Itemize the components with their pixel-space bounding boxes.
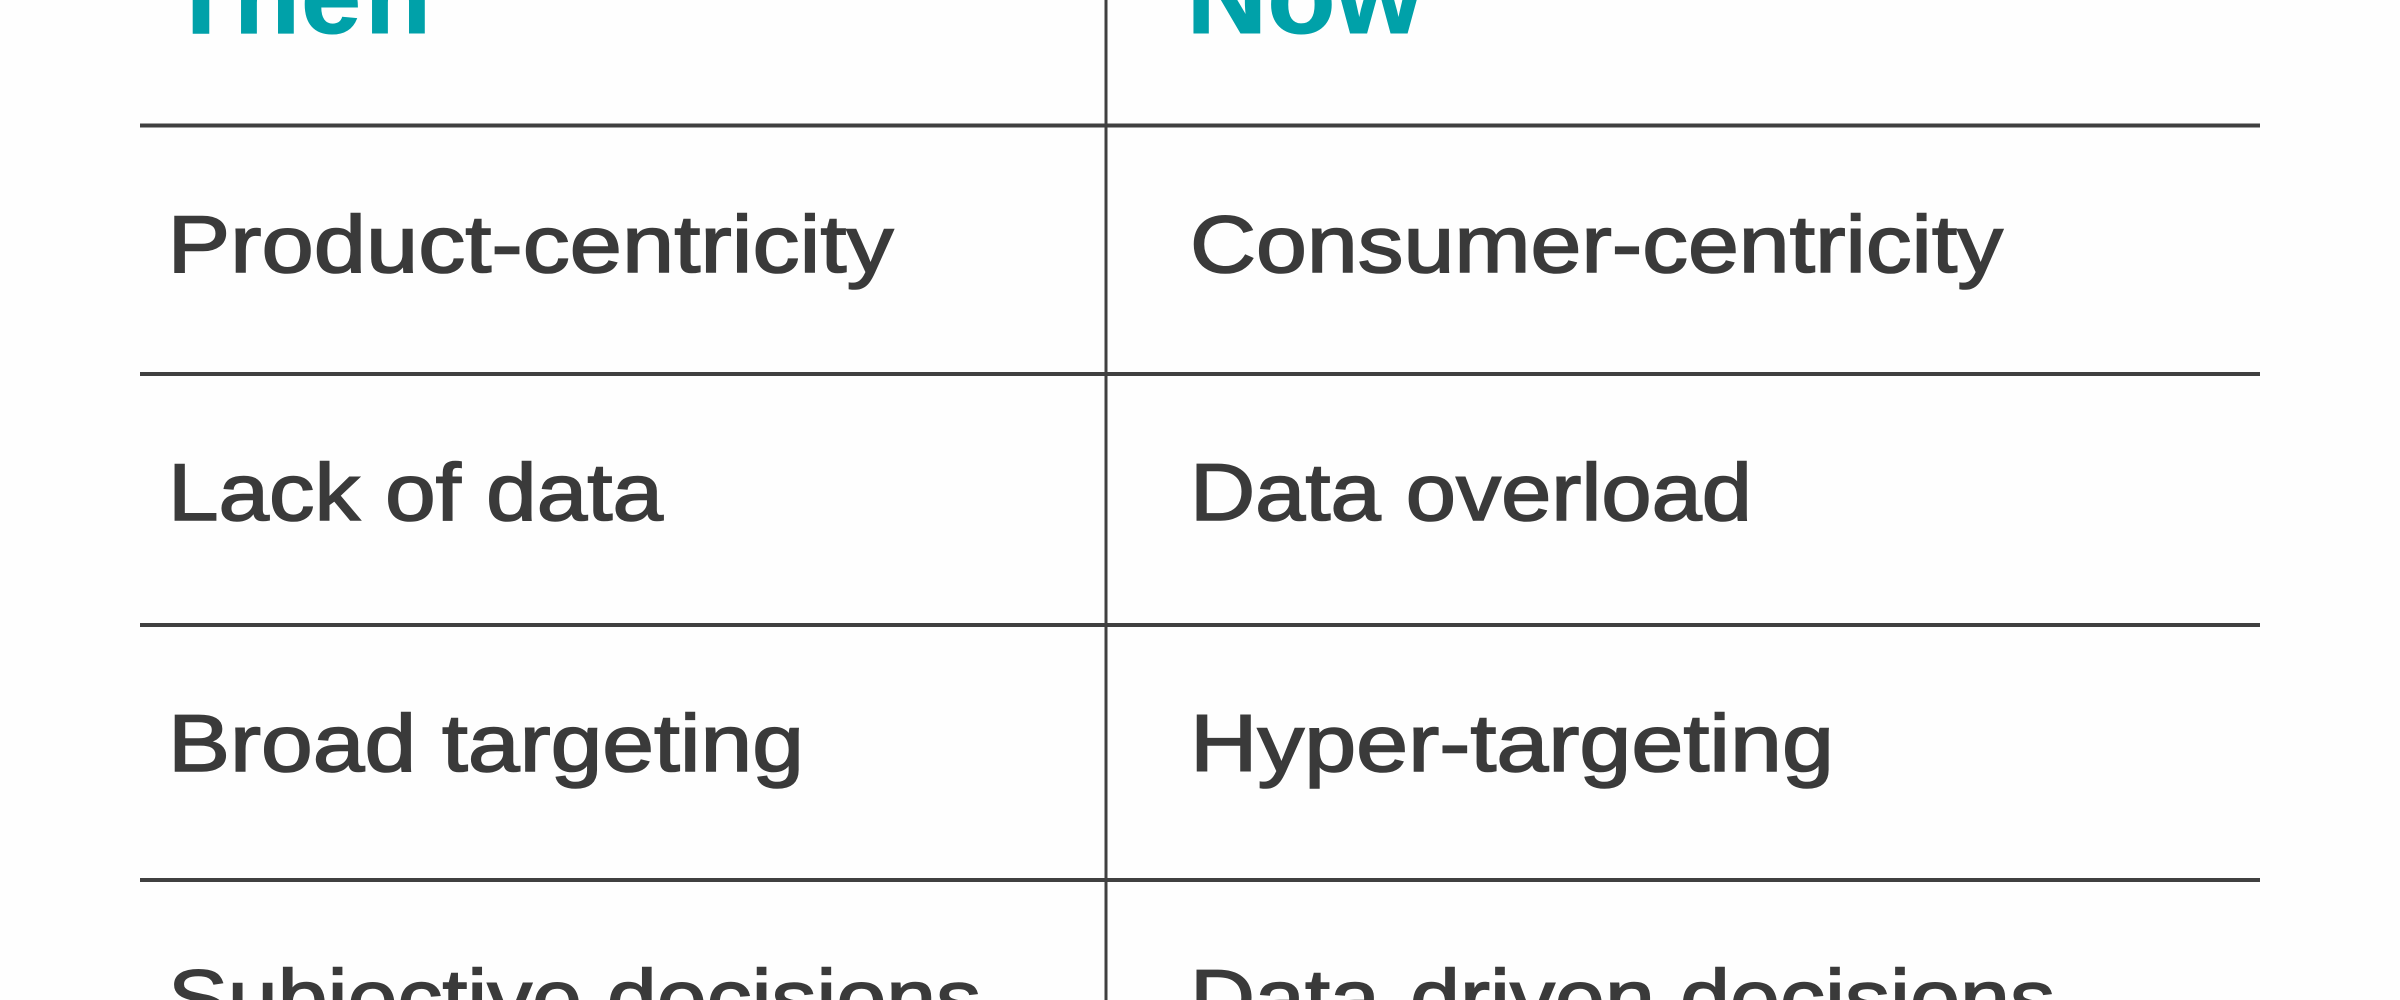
row 1: then: Product-centricity: [168, 200, 894, 290]
row 2: now: Data overload: [1190, 448, 1752, 538]
row 3: then: Broad targeting: [168, 699, 804, 789]
row 1: now: Consumer-centricity: [1190, 200, 2004, 290]
row 2: then: Lack of data: [168, 448, 664, 538]
row 3: now: Hyper-targeting: [1190, 699, 1834, 789]
